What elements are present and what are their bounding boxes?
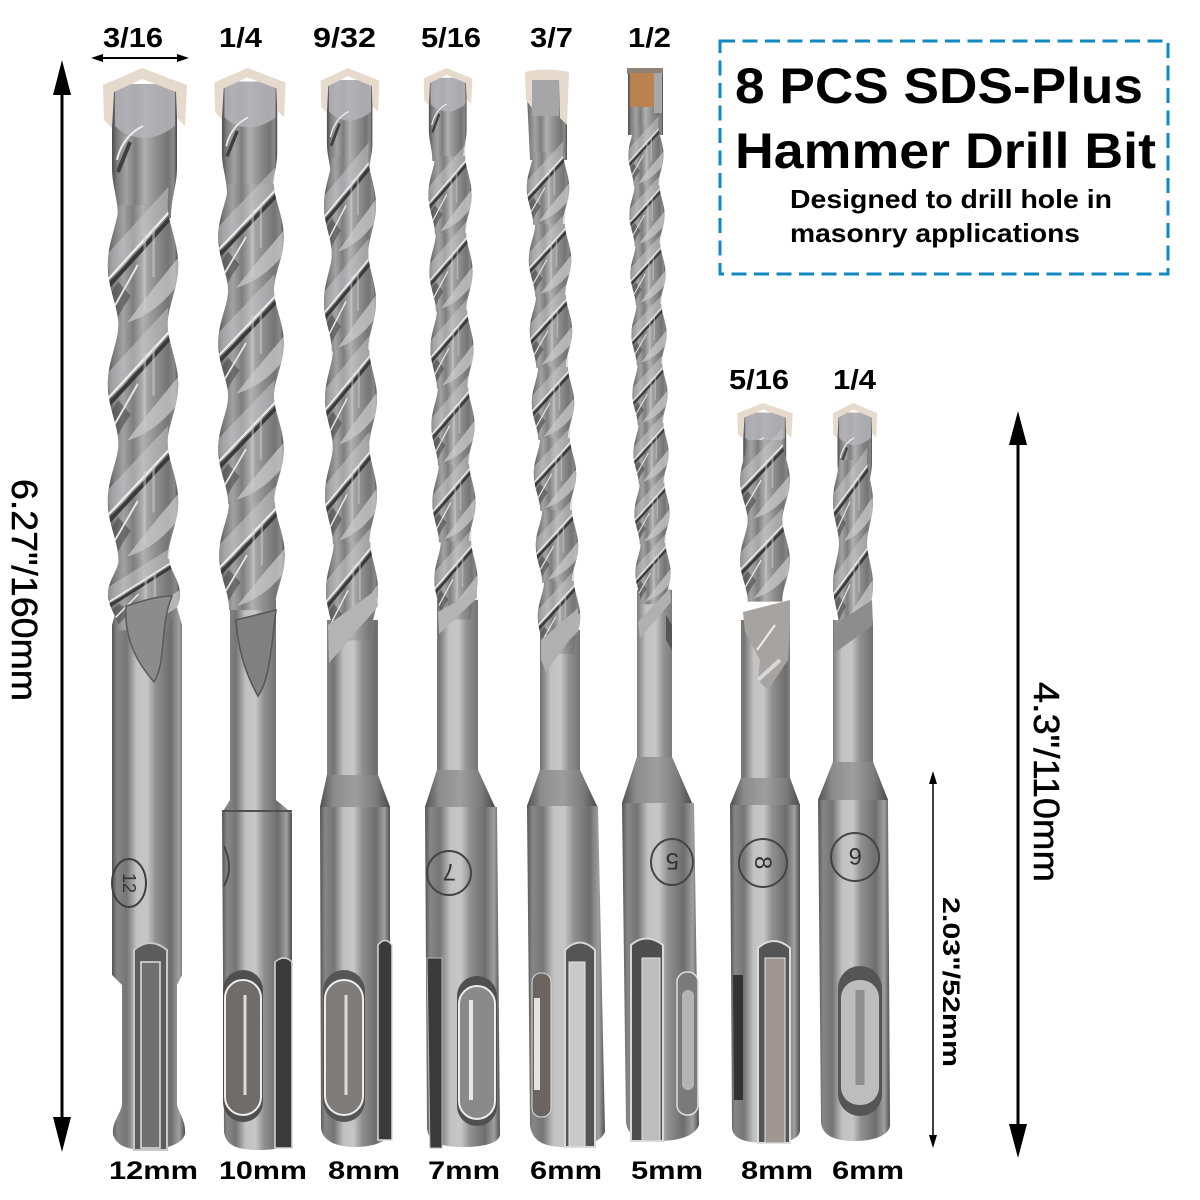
bottom metric labels: 7mm — [428, 1157, 500, 1185]
drill bit 6mm short — [818, 403, 890, 1141]
top size labels: 3/7 — [530, 22, 573, 53]
drill bit 10mm — [214, 68, 292, 1150]
top size labels: 5/16 — [421, 22, 481, 53]
bottom metric labels: 8mm — [741, 1157, 813, 1185]
top size labels: 1/4 — [833, 364, 876, 395]
bottom metric labels — [109, 1157, 904, 1185]
drill bit 8mm short: 8 — [749, 856, 776, 869]
drill bit 8mm short — [730, 403, 800, 1143]
arrow: 52mm shank — [929, 771, 937, 1148]
label: 160mm: 6.27"/160mm — [4, 479, 45, 701]
top size labels: 9/32 — [313, 22, 376, 53]
title box — [720, 41, 1168, 274]
bottom metric labels: 6mm — [832, 1157, 904, 1185]
tip — [525, 70, 569, 125]
slot: oval — [838, 966, 882, 1116]
top size labels: 1/4 — [219, 22, 262, 53]
bottom metric labels: 12mm — [109, 1157, 198, 1185]
top size labels — [103, 22, 876, 395]
bottom metric labels: 6mm — [530, 1157, 602, 1185]
drill bit 5mm — [622, 68, 699, 1141]
drill bit 8mm — [320, 68, 392, 1147]
drill bit 7mm: 7 — [443, 858, 456, 885]
top size labels: 3/16 — [103, 22, 163, 53]
drill bit 7mm — [424, 68, 500, 1148]
drill bit 5mm: 5 — [666, 847, 679, 874]
top size labels: 1/2 — [628, 22, 671, 53]
slot: oval — [457, 976, 497, 1126]
bottom metric labels: 8mm — [328, 1157, 400, 1185]
tip — [627, 68, 663, 113]
drill bit 12mm: 12 — [119, 873, 139, 893]
bottom metric labels: 5mm — [631, 1157, 703, 1185]
arrow: tip width — [91, 54, 189, 62]
drill bit 6mm short: 6 — [849, 842, 862, 869]
description line two: masonry applications — [790, 218, 1080, 248]
slot: oval — [323, 970, 365, 1122]
arrow: 160mm overall length — [53, 60, 71, 1152]
subtitle line: Hammer Drill Bit — [735, 123, 1156, 179]
drill bit 12mm — [103, 68, 187, 1150]
slot: oval — [223, 970, 263, 1122]
label: 110mm: 4.3"/110mm — [1026, 682, 1067, 882]
title: 8 PCS SDS-Plus — [735, 58, 1143, 114]
bottom metric labels: 10mm — [219, 1157, 307, 1185]
top size labels: 5/16 — [729, 364, 789, 395]
description line one: Designed to drill hole in — [790, 184, 1112, 214]
arrow: 110mm length — [1009, 411, 1027, 1158]
label: 52mm: 2.03"/52mm — [937, 897, 964, 1067]
drill bit 6mm — [525, 70, 605, 1147]
